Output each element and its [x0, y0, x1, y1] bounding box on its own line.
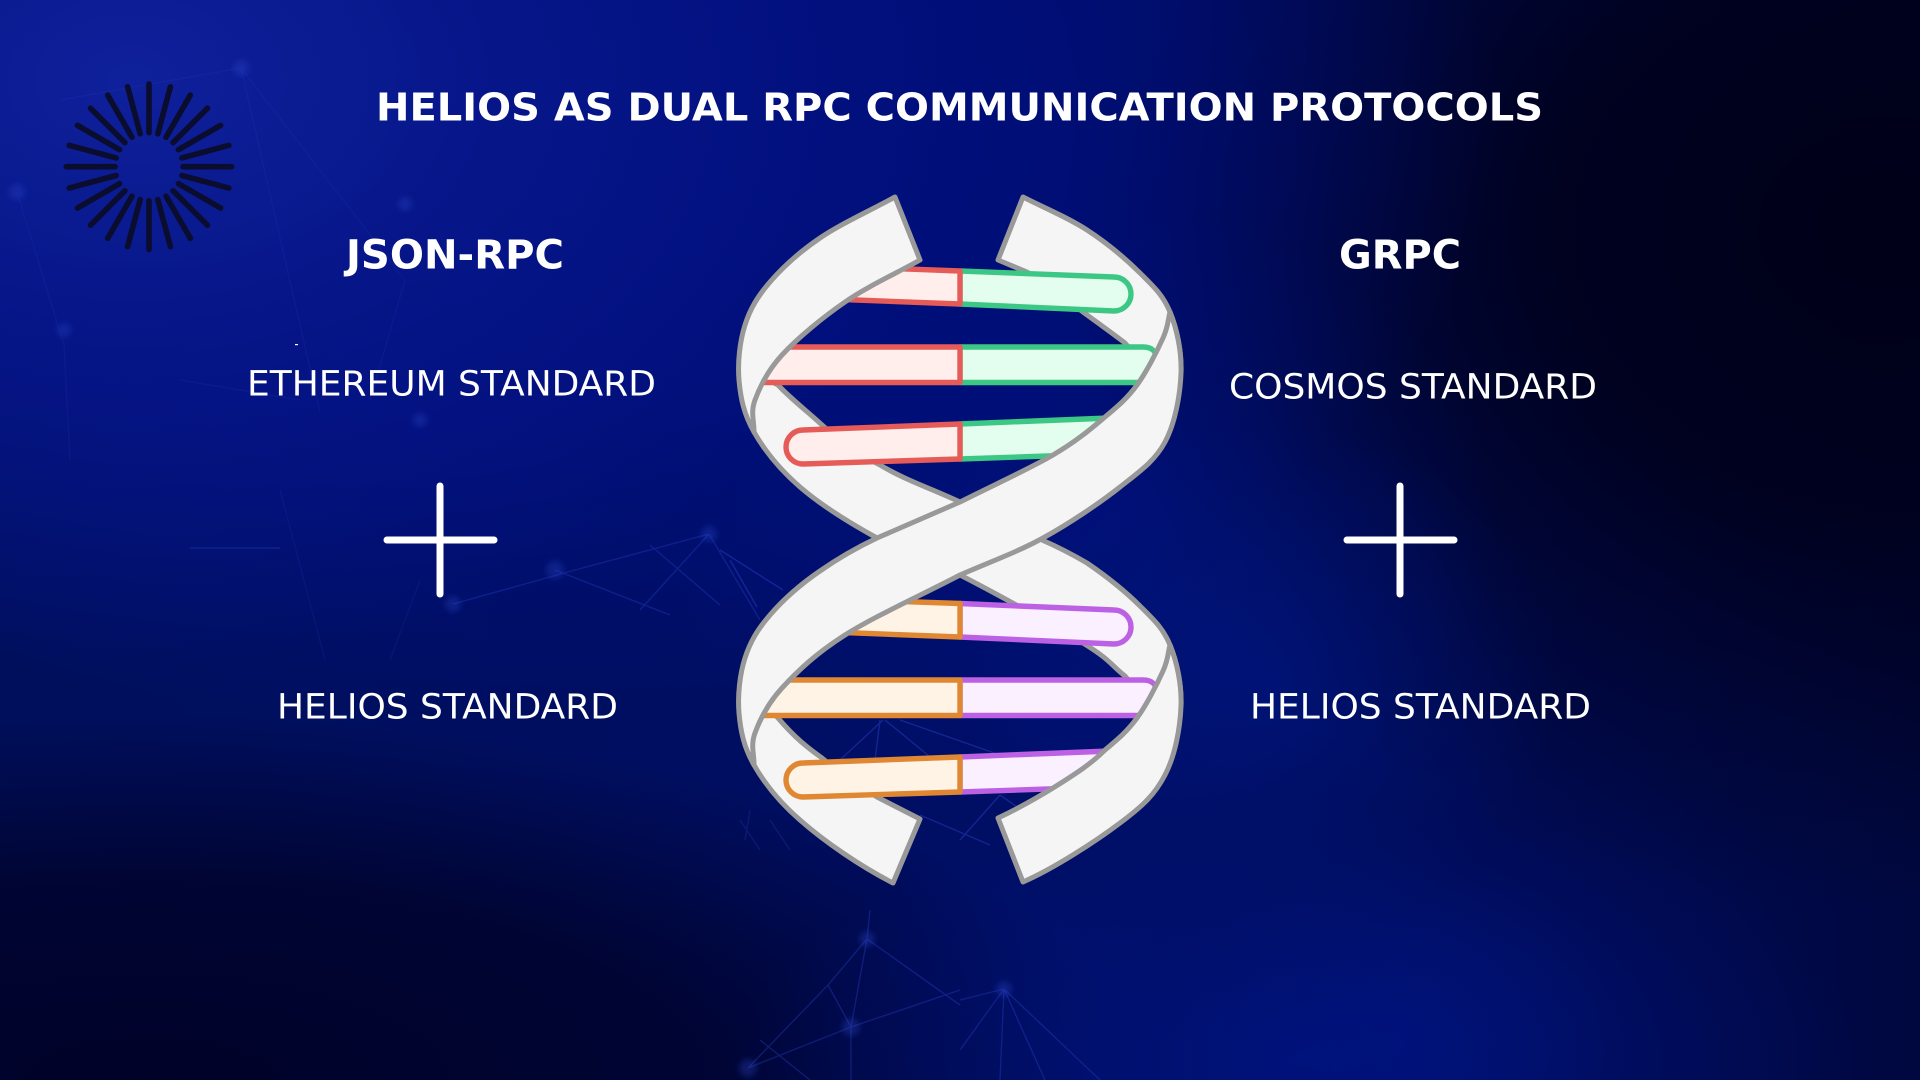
strand A top left section in front — [739, 197, 920, 432]
title: HELIOS AS DUAL RPC COMMUNICATION PROTOCOLS — [376, 86, 1543, 131]
logo: black sunburst icon — [66, 84, 232, 249]
icon: right plus — [1347, 486, 1454, 594]
purple rung 3 — [960, 750, 1135, 792]
red rung 2 — [755, 347, 960, 382]
text: Helios standard right: HELIOS STANDARD — [1250, 687, 1591, 727]
red rung 1 — [830, 266, 960, 304]
background network nodes — [9, 60, 1012, 1077]
DNA helix illustration — [739, 197, 1181, 883]
heading: JSON-RPC: JSON-RPC — [343, 233, 564, 279]
strand B top right section behind rungs — [998, 197, 1181, 373]
green rung 1 — [960, 271, 1131, 311]
rungs: upper pair green and red — [755, 266, 1157, 464]
text: Ethereum standard: ETHEREUM STANDARD — [247, 365, 656, 405]
green rung 2 — [960, 347, 1157, 382]
text: Helios standard left: HELIOS STANDARD — [277, 687, 618, 727]
strand B bottom left section behind rungs — [745, 705, 920, 883]
strand B crossing section in front — [739, 312, 1181, 765]
heading: GRPC: GRPC — [1339, 233, 1461, 279]
text: Cosmos standard: COSMOS STANDARD — [1229, 368, 1597, 408]
red rung 3 — [786, 424, 960, 464]
orange rung 3 — [786, 757, 960, 797]
orange rung 2 — [755, 680, 960, 716]
orange rung 1 — [830, 599, 960, 637]
icon: left plus — [387, 486, 494, 594]
strand A middle section behind rungs — [745, 370, 1181, 725]
green rung 3 — [960, 417, 1135, 459]
small stray mark — [295, 344, 298, 345]
strand A bottom right section in front — [998, 645, 1181, 882]
purple rung 2 — [960, 680, 1157, 716]
background network pattern — [17, 68, 1100, 1080]
purple rung 1 — [960, 604, 1131, 644]
rungs: lower pair purple and orange — [755, 599, 1157, 797]
